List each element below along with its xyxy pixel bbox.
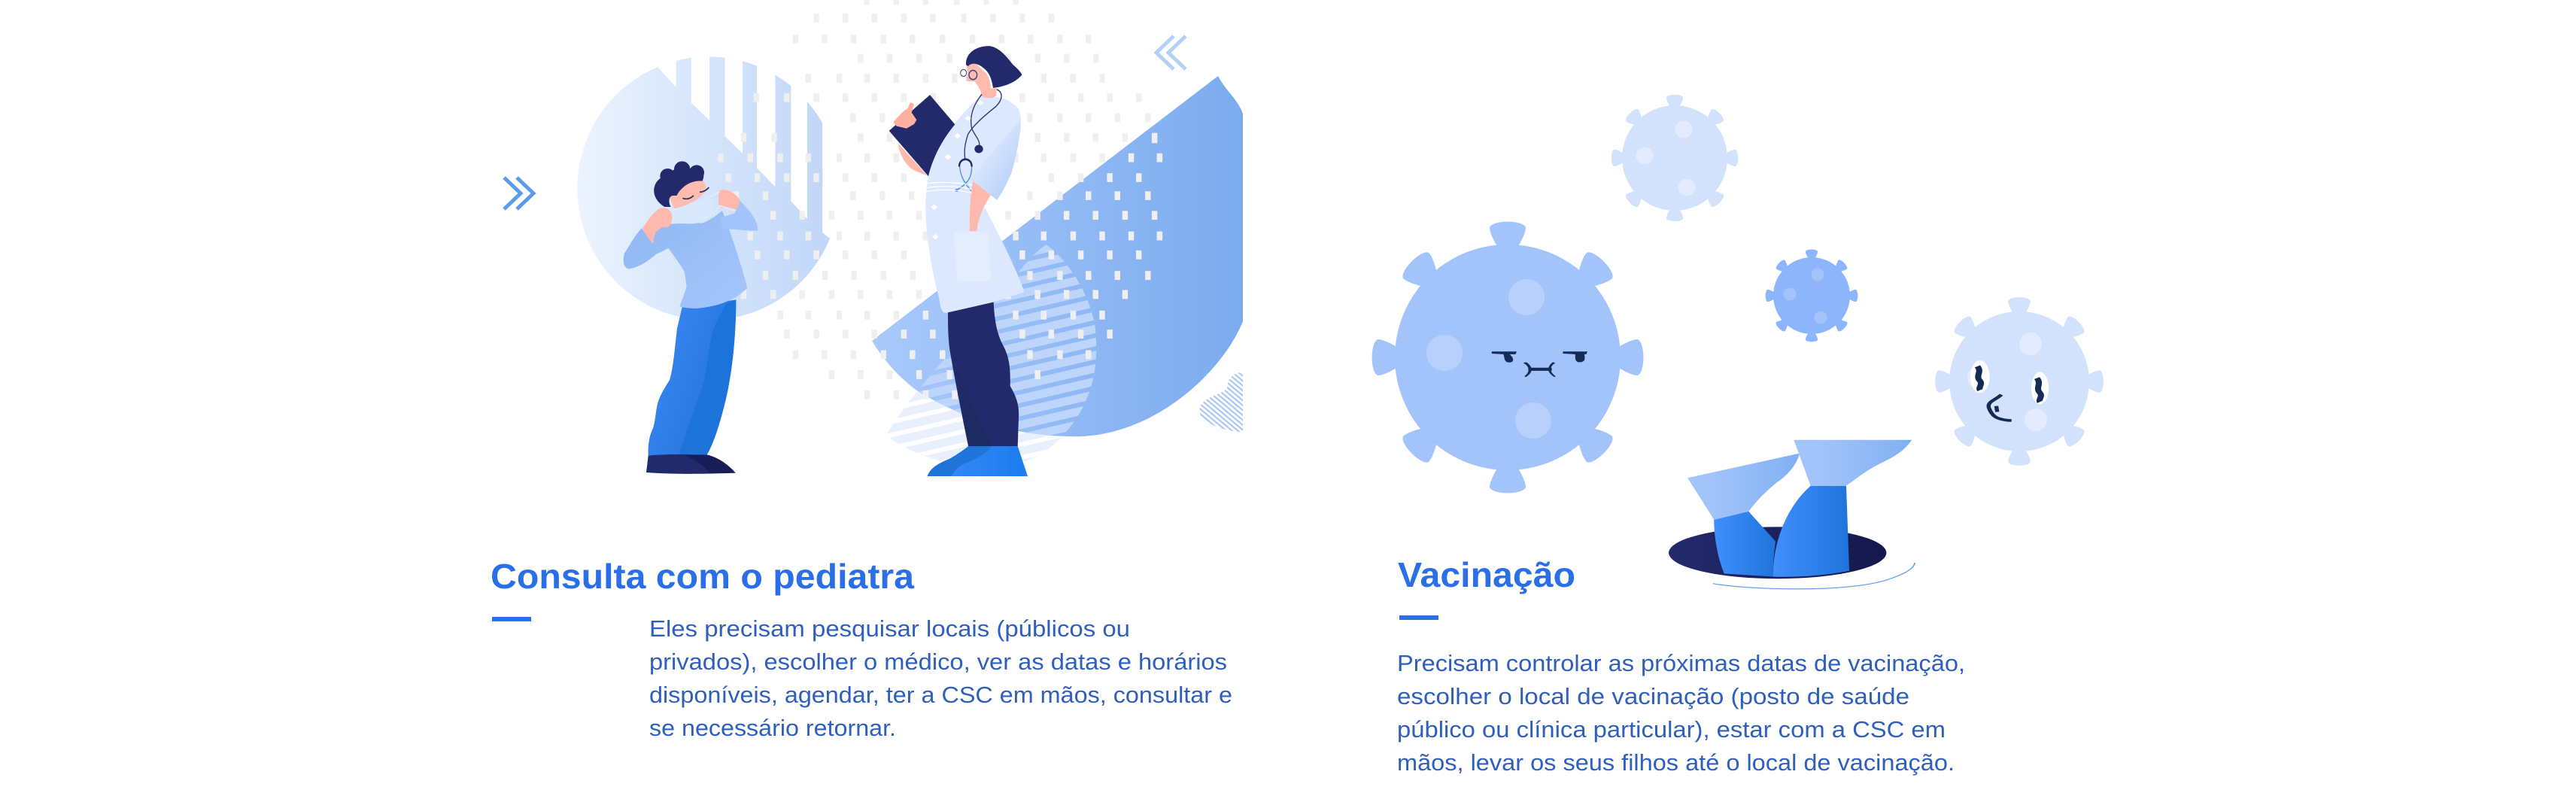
text block: vacinacao: público ou clínica particular), estar com a CSC em bbox=[1397, 716, 1946, 743]
virus: big with grumpy face bbox=[1372, 222, 1643, 493]
accent bar: consulta bbox=[492, 617, 531, 621]
large blue blob bbox=[872, 76, 1243, 436]
heading: consulta: Consulta com o pediatra bbox=[491, 557, 914, 596]
text block: consulta bbox=[649, 615, 1232, 741]
heading: vacinacao: Vacinação bbox=[1398, 555, 1575, 594]
text block: consulta: privados), escolher o médico, ver as datas e horários bbox=[649, 648, 1227, 675]
text block: consulta: Eles precisam pesquisar locais (públicos ou bbox=[649, 615, 1130, 642]
pale circle with white stripes and dot pattern bbox=[577, 0, 1159, 399]
panel: pediatrician illustration bbox=[504, 0, 1243, 476]
virus: top pale bbox=[1612, 95, 1738, 221]
virus: right pale with dizzy face bbox=[1935, 297, 2104, 466]
virus: small medium blue bbox=[1766, 250, 1858, 342]
text block: vacinacao: mãos, levar os seus filhos até o local de vacinação. bbox=[1397, 749, 1955, 776]
text block: vacinacao bbox=[1397, 650, 1965, 776]
text block: consulta: se necessário retornar. bbox=[649, 715, 896, 741]
panel: vaccination illustration bbox=[1372, 95, 2104, 589]
doctor with clipboard and stethoscope bbox=[889, 46, 1028, 476]
hole bbox=[1669, 527, 1886, 579]
striped leaf over blob bbox=[919, 245, 1097, 435]
pale striped leaf behind blob bbox=[886, 245, 1096, 467]
text block: vacinacao: Precisam controlar as próximas datas de vacinação, bbox=[1397, 650, 1965, 676]
boy putting on mask bbox=[624, 161, 758, 474]
accent bar: vacinacao bbox=[1399, 615, 1438, 620]
chevrons left-pointing bbox=[1156, 36, 1186, 69]
hatched small blob bbox=[1199, 372, 1243, 432]
text block: consulta: disponíveis, agendar, ter a CSC em mãos, consultar e bbox=[649, 682, 1232, 708]
legs falling into hole bbox=[1669, 440, 1915, 589]
text block: vacinacao: escolher o local de vacinação (posto de saúde bbox=[1397, 683, 1909, 709]
chevrons right-pointing bbox=[504, 178, 533, 209]
